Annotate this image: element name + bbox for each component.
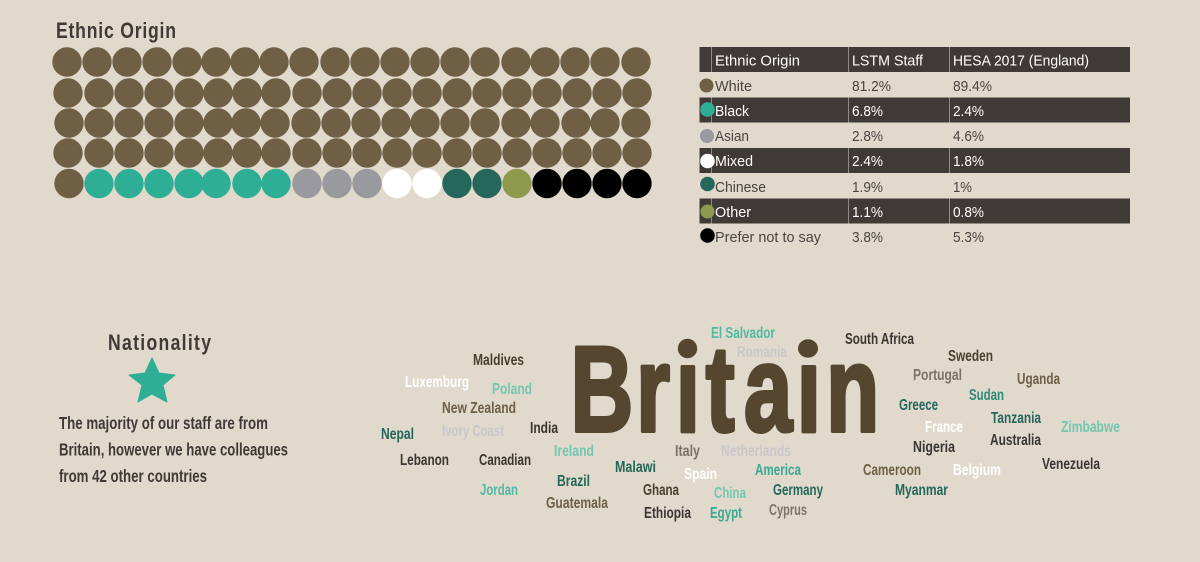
word: Guatemala: Guatemala (546, 495, 608, 512)
word: Poland: Poland (492, 381, 532, 398)
table row: Mixed: 1.8% (953, 153, 984, 170)
text block: nationality summary: from 42 other countries (59, 466, 207, 486)
word: Cameroon: Cameroon (863, 462, 921, 479)
word: Nigeria: Nigeria (913, 439, 955, 456)
word: Myanmar: Myanmar (895, 482, 948, 499)
table row: White (715, 78, 992, 95)
legend dots for table rows (700, 78, 715, 243)
table row: White: 81.2% (852, 78, 891, 95)
word: America: America (755, 462, 801, 479)
word: Luxemburg: Luxemburg (405, 374, 469, 391)
word: South Africa: South Africa (845, 331, 914, 348)
table header row: HESA 2017 (England) (953, 52, 1089, 70)
heading: Ethnic Origin: Ethnic Origin (56, 19, 176, 44)
table row: Asian: Asian (715, 128, 749, 145)
table row: Prefer not to say: 5.3% (953, 229, 984, 246)
word: Canadian: Canadian (479, 452, 531, 469)
word: Malawi: Malawi (615, 459, 656, 476)
table row: Prefer not to say: Prefer not to say (715, 229, 821, 246)
table header row (700, 47, 1130, 72)
word: Italy: Italy (675, 443, 700, 460)
table header row: Ethnic Origin (715, 52, 800, 70)
word: Uganda: Uganda (1017, 371, 1060, 388)
word: Lebanon: Lebanon (400, 452, 449, 469)
word: Egypt: Egypt (710, 505, 742, 522)
word: Sweden: Sweden (948, 348, 993, 365)
table row: Black (700, 98, 1130, 122)
word: Ireland: Ireland (554, 443, 594, 460)
word: Jordan: Jordan (480, 482, 518, 499)
table row: Asian: 4.6% (953, 128, 984, 145)
table row: Prefer not to say (715, 229, 984, 246)
table row: Asian: 2.8% (852, 128, 883, 145)
word: Zimbabwe: Zimbabwe (1061, 419, 1120, 436)
table row: Other: Other (715, 204, 751, 221)
table row: Asian (715, 128, 984, 145)
word: Cyprus: Cyprus (769, 502, 807, 519)
word: Ghana: Ghana (643, 482, 679, 499)
table row: Chinese: 1.9% (852, 179, 883, 196)
table row: Mixed (700, 148, 1130, 173)
table row: Other: 1.1% (852, 204, 883, 221)
word: Tanzania: Tanzania (991, 410, 1041, 427)
word cloud: countries of origin (381, 321, 1120, 522)
table row: White: 89.4% (953, 78, 992, 95)
text block: nationality summary: The majority of our staff are from (59, 413, 268, 433)
word: Romania: Romania (737, 344, 787, 361)
table row: Black: 2.4% (953, 103, 984, 120)
word: Sudan: Sudan (969, 387, 1004, 404)
word: Australia: Australia (990, 432, 1041, 449)
word: Ivory Coast: Ivory Coast (442, 423, 504, 440)
word: Maldives: Maldives (473, 352, 524, 369)
word: Germany: Germany (773, 482, 823, 499)
table row: Chinese: Chinese (715, 179, 766, 196)
word: China: China (714, 485, 746, 502)
table row: Chinese (715, 179, 972, 196)
word: Nepal: Nepal (381, 426, 414, 443)
table row: Black: Black (715, 103, 749, 120)
table row: Other: 0.8% (953, 204, 984, 221)
table row: Black: 6.8% (852, 103, 883, 120)
table row: Other (700, 198, 1130, 224)
word: Belgium: Belgium (953, 462, 1001, 479)
icon: star (129, 358, 175, 402)
heading: Nationality: Nationality (108, 331, 211, 356)
word: Ethiopia: Ethiopia (644, 505, 691, 522)
table row: Mixed: Mixed (715, 153, 753, 170)
word: Britain: Britain (571, 321, 879, 458)
word: El Salvador: El Salvador (711, 325, 775, 342)
text block: nationality summary (59, 413, 288, 486)
word: Spain: Spain (684, 466, 717, 483)
table row: Chinese: 1% (953, 179, 972, 196)
word: India: India (530, 420, 558, 437)
table row: White: White (715, 78, 752, 95)
word: New Zealand: New Zealand (442, 400, 516, 417)
table: ethnic origin comparison (700, 47, 1130, 246)
table row: Prefer not to say: 3.8% (852, 229, 883, 246)
dot matrix chart: ethnic origin of 100 staff (52, 47, 652, 198)
word: Netherlands: Netherlands (721, 443, 791, 460)
word: France: France (925, 419, 963, 436)
word: Portugal: Portugal (913, 367, 962, 384)
word: Greece: Greece (899, 397, 938, 414)
word: Brazil: Brazil (557, 473, 590, 490)
table row: Mixed: 2.4% (852, 153, 883, 170)
text block: nationality summary: Britain, however we have colleagues (59, 440, 288, 460)
word: Venezuela: Venezuela (1042, 456, 1100, 473)
table header row: LSTM Staff (852, 52, 924, 70)
